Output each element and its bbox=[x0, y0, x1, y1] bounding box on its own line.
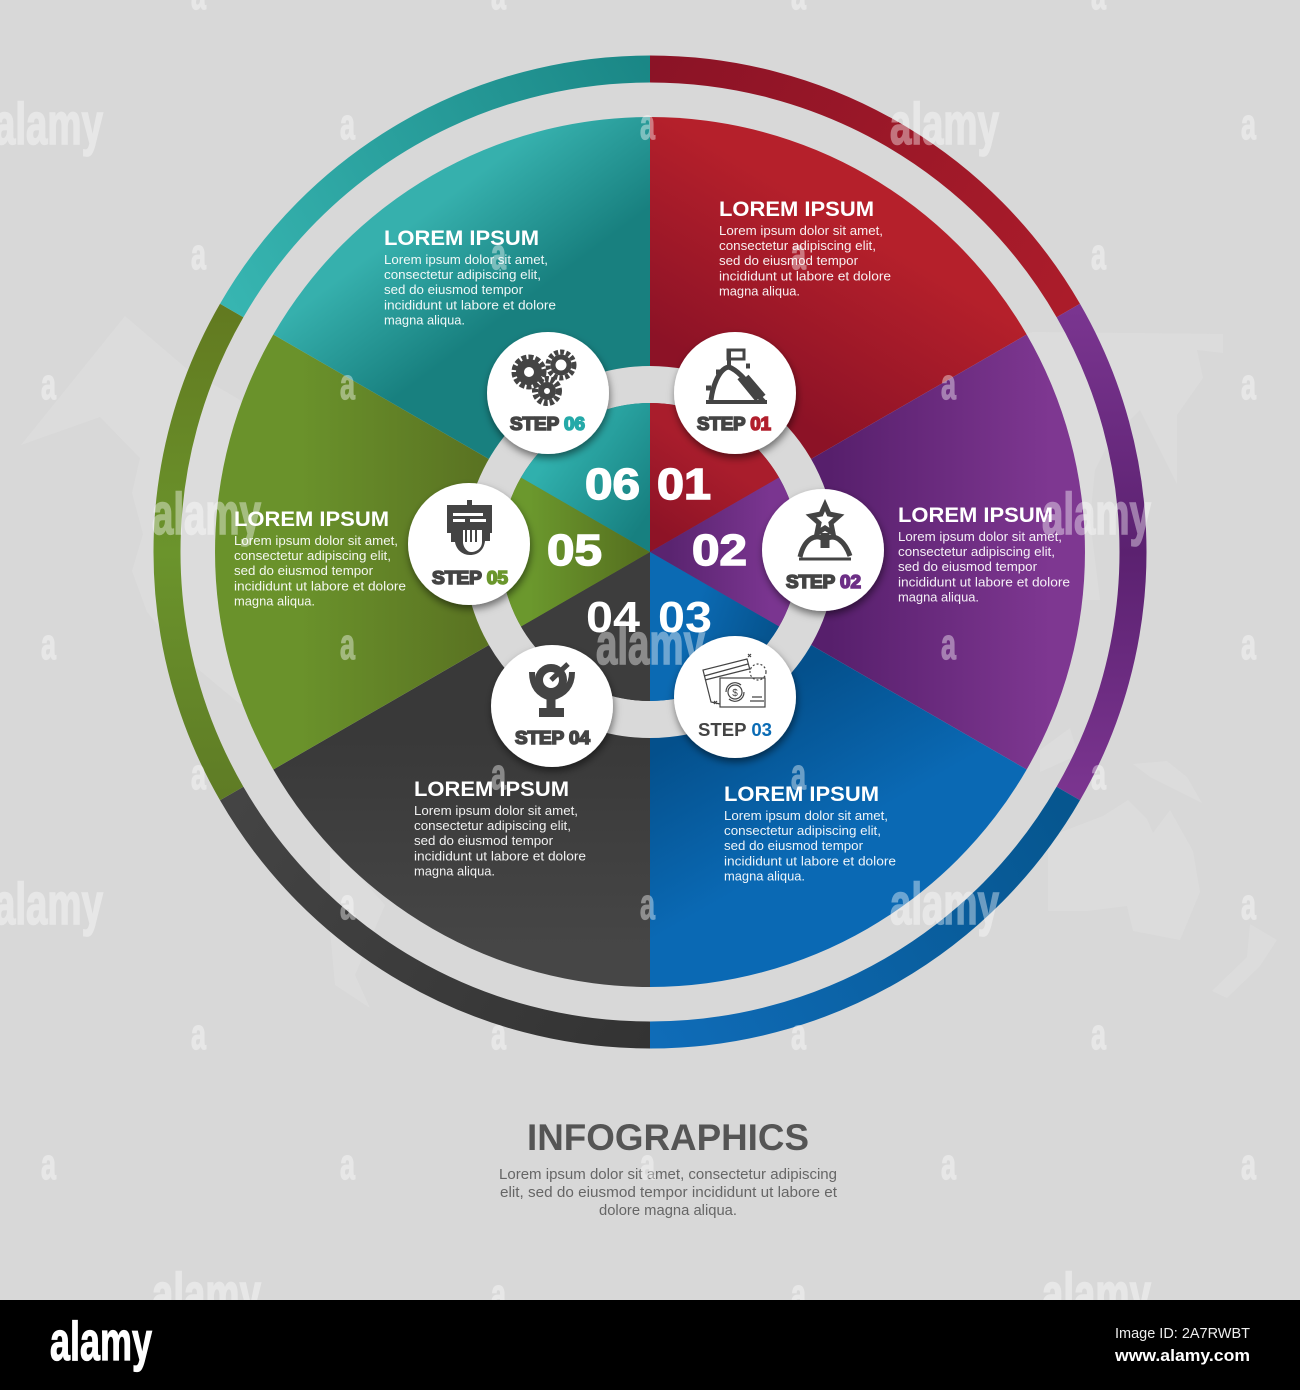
watermarks: a bbox=[791, 1270, 806, 1319]
text block: teal: LOREM IPSUM bbox=[384, 227, 539, 250]
watermarks: a bbox=[941, 360, 956, 409]
text block: purple bbox=[898, 504, 1070, 604]
text block: dark grey: LOREM IPSUM bbox=[414, 778, 569, 801]
step 04 badge bbox=[491, 645, 613, 767]
watermarks: a bbox=[41, 360, 56, 409]
icon: hand on board bbox=[447, 500, 492, 555]
text block: dark grey: Lorem ipsum dolor sit amet, bbox=[414, 803, 578, 818]
watermarks: a bbox=[791, 230, 806, 279]
watermarks: a bbox=[791, 1010, 806, 1059]
icon: trophy target bbox=[532, 664, 572, 717]
step 06 badge bbox=[487, 332, 609, 454]
text block: red bbox=[719, 198, 891, 298]
watermarks: a bbox=[640, 1140, 655, 1189]
watermarks: alamy bbox=[152, 482, 261, 547]
watermarks: a bbox=[41, 1140, 56, 1189]
watermarks: a bbox=[1241, 100, 1256, 149]
text block: red: Lorem ipsum dolor sit amet, bbox=[719, 223, 883, 238]
text block: blue: incididunt ut labore et dolore bbox=[724, 853, 896, 868]
step 05 badge bbox=[408, 483, 530, 605]
text block: teal: incididunt ut labore et dolore bbox=[384, 297, 556, 312]
text block: purple: consectetur adipiscing elit, bbox=[898, 544, 1055, 559]
watermarks: alamy bbox=[890, 92, 999, 157]
watermarks: alamy bbox=[890, 872, 999, 937]
watermarks: a bbox=[941, 1140, 956, 1189]
text block: red: sed do eiusmod tempor bbox=[719, 253, 859, 268]
watermarks: alamy bbox=[596, 612, 705, 677]
image id: Image ID: 2A7RWBT bbox=[1115, 1325, 1250, 1342]
watermarks: a bbox=[941, 620, 956, 669]
number 06: 06 bbox=[585, 460, 640, 509]
label: step 01: STEP 01 bbox=[697, 414, 771, 434]
text block: purple: sed do eiusmod tempor bbox=[898, 559, 1038, 574]
watermarks: a bbox=[340, 360, 355, 409]
watermarks: a bbox=[340, 1140, 355, 1189]
number 03: 03 bbox=[658, 593, 712, 642]
label: step 05: STEP 05 bbox=[432, 568, 508, 588]
step 02 badge bbox=[762, 489, 884, 611]
watermarks: a bbox=[491, 1270, 506, 1319]
label: step 04: STEP 04 bbox=[515, 728, 590, 748]
watermarks: a bbox=[1091, 230, 1106, 279]
text block: dark grey: sed do eiusmod tempor bbox=[414, 833, 554, 848]
text block: dark grey: magna aliqua. bbox=[414, 863, 495, 878]
text block: purple: LOREM IPSUM bbox=[898, 504, 1053, 527]
outer ring segments bbox=[167, 69, 1133, 1035]
text block: green: sed do eiusmod tempor bbox=[234, 563, 374, 578]
text block: red: magna aliqua. bbox=[719, 283, 800, 298]
number 05: 05 bbox=[547, 526, 602, 575]
pie wedges bbox=[215, 117, 1085, 987]
text block: green: consectetur adipiscing elit, bbox=[234, 548, 391, 563]
watermarks: a bbox=[1241, 360, 1256, 409]
text block: blue: Lorem ipsum dolor sit amet, bbox=[724, 808, 888, 823]
text block: teal bbox=[384, 227, 556, 327]
watermarks: a bbox=[1241, 620, 1256, 669]
text block: blue: LOREM IPSUM bbox=[724, 783, 879, 806]
label: step 06: STEP 06 bbox=[510, 414, 585, 434]
description: Lorem ipsum dolor sit amet, consectetur adipiscing bbox=[499, 1167, 837, 1183]
text block: green bbox=[234, 508, 406, 608]
text block: green: LOREM IPSUM bbox=[234, 508, 389, 531]
world map silhouette bbox=[21, 316, 1277, 1008]
icon: gears bbox=[514, 352, 574, 403]
inner disc wedges bbox=[501, 403, 799, 701]
description bbox=[499, 1167, 837, 1219]
watermarks: a bbox=[640, 880, 655, 929]
text block: red: incididunt ut labore et dolore bbox=[719, 268, 891, 283]
text block: green: incididunt ut labore et dolore bbox=[234, 578, 406, 593]
step 03 badge bbox=[674, 636, 796, 758]
footer bar bbox=[0, 1300, 1300, 1390]
watermarks: a bbox=[191, 230, 206, 279]
text block: red: consectetur adipiscing elit, bbox=[719, 238, 876, 253]
text block: purple: incididunt ut labore et dolore bbox=[898, 574, 1070, 589]
footer logo: alamy bbox=[50, 1310, 152, 1372]
watermarks: a bbox=[191, 1010, 206, 1059]
watermarks: a bbox=[491, 750, 506, 799]
watermarks: alamy bbox=[152, 1262, 261, 1327]
icon: mountain with flag bbox=[706, 350, 767, 402]
text block: teal: magna aliqua. bbox=[384, 312, 465, 327]
number 04: 04 bbox=[586, 593, 641, 642]
number 02: 02 bbox=[692, 526, 747, 575]
watermarks: a bbox=[1091, 1010, 1106, 1059]
description: dolore magna aliqua. bbox=[599, 1203, 737, 1219]
text block: purple: Lorem ipsum dolor sit amet, bbox=[898, 529, 1062, 544]
watermarks: alamy bbox=[1042, 482, 1151, 547]
watermarks: a bbox=[340, 100, 355, 149]
label: step 03: STEP 03 bbox=[698, 720, 772, 740]
text block: teal: sed do eiusmod tempor bbox=[384, 282, 524, 297]
inner grey ring bbox=[482, 384, 818, 720]
text block: green: magna aliqua. bbox=[234, 593, 315, 608]
text block: dark grey: incididunt ut labore et dolore bbox=[414, 848, 586, 863]
watermarks: a bbox=[1241, 1140, 1256, 1189]
text block: blue: magna aliqua. bbox=[724, 868, 805, 883]
watermarks: a bbox=[191, 750, 206, 799]
step 01 badge bbox=[674, 332, 796, 454]
text block: purple: magna aliqua. bbox=[898, 589, 979, 604]
text block: teal: Lorem ipsum dolor sit amet, bbox=[384, 252, 548, 267]
label: step 02: STEP 02 bbox=[786, 572, 861, 592]
watermarks: a bbox=[340, 620, 355, 669]
text block: green: Lorem ipsum dolor sit amet, bbox=[234, 533, 398, 548]
text block: dark grey: consectetur adipiscing elit, bbox=[414, 818, 571, 833]
watermarks: a bbox=[1241, 880, 1256, 929]
description: elit, sed do eiusmod tempor incididunt ut labore et bbox=[500, 1185, 837, 1201]
watermarks: a bbox=[791, 750, 806, 799]
watermarks: a bbox=[41, 620, 56, 669]
text block: red: LOREM IPSUM bbox=[719, 198, 874, 221]
watermarks: a bbox=[491, 230, 506, 279]
text block: blue bbox=[724, 783, 896, 883]
text block: blue: consectetur adipiscing elit, bbox=[724, 823, 881, 838]
watermarks: alamy bbox=[1042, 1262, 1151, 1327]
watermarks: a bbox=[1091, 750, 1106, 799]
number 01: 01 bbox=[657, 460, 711, 509]
icon: credit cards and money: $ bbox=[732, 688, 738, 699]
icon: star over hill bbox=[799, 505, 851, 559]
watermarks: a bbox=[340, 880, 355, 929]
text block: blue: sed do eiusmod tempor bbox=[724, 838, 864, 853]
text block: dark grey bbox=[414, 778, 586, 878]
text block: teal: consectetur adipiscing elit, bbox=[384, 267, 541, 282]
site url: www.alamy.com bbox=[1114, 1347, 1250, 1365]
title: INFOGRAPHICS bbox=[527, 1117, 809, 1158]
watermarks: a bbox=[491, 1010, 506, 1059]
watermarks: a bbox=[640, 100, 655, 149]
